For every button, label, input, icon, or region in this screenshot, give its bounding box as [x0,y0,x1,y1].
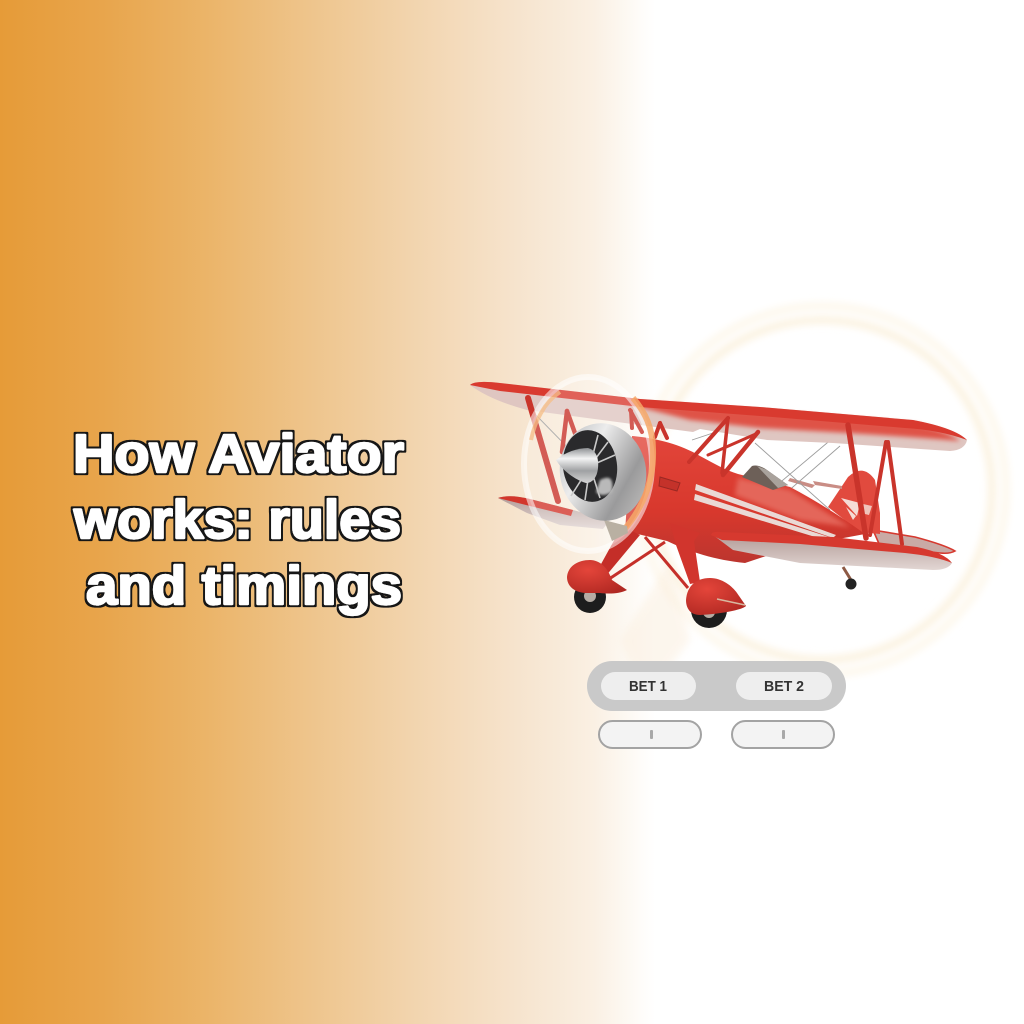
wing leading edge [470,382,967,440]
spinner cone [556,448,598,483]
bet 1 button: BET 1 [629,678,667,695]
engine mount [604,520,628,541]
tail wheel [843,567,856,590]
right gear leg [670,523,700,584]
left wheel [567,560,627,613]
bet 2 button [736,672,832,700]
propeller disc [524,377,653,551]
engine cowling [551,415,655,529]
title: and timings [86,556,402,616]
lower wing left [498,496,610,529]
rear fuselage highlight [735,478,850,527]
left gear leg [595,526,640,583]
fuselage [625,436,865,563]
landing gear struts [600,537,688,588]
engine hatch [659,477,680,491]
wing shading [620,402,960,441]
right wheel [686,578,746,628]
fuselage stripes [694,484,836,540]
cockpit [742,466,788,490]
rigging wires [533,412,846,520]
panel background [587,661,846,711]
title: works: rules [73,490,401,550]
bet buttons panel [587,661,846,748]
biplane illustration [470,377,967,628]
soft light beam [620,560,690,700]
bet 2 button: BET 2 [764,678,804,695]
title [73,424,404,616]
horizontal stabilizer [788,478,842,489]
bet 1 input [599,721,701,748]
bet 1 button [601,672,696,700]
rear tail plane [873,530,955,553]
wing struts [528,398,902,544]
large glow ring behind plane [638,306,1006,674]
title: How Aviator [73,424,404,484]
tail fin [828,471,880,534]
top wing [470,382,967,451]
bet 2 input [732,721,834,748]
lower wing right [711,532,952,570]
